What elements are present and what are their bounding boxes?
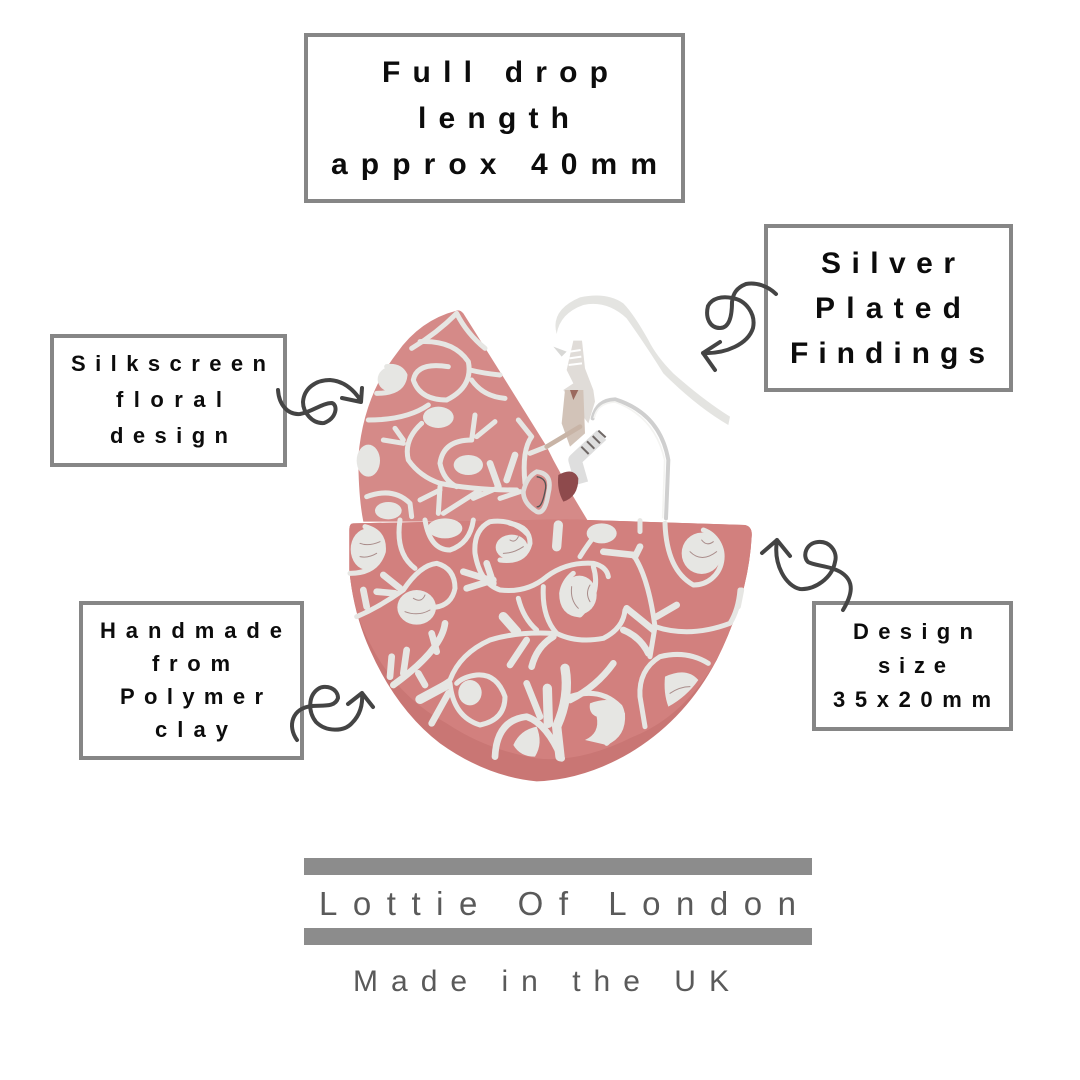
callout: design size: 35x20mm	[833, 687, 991, 712]
tagline: Made in the UK	[353, 965, 729, 998]
callout: handmade from polymer clay	[81, 603, 302, 758]
earring: back half-moon with floral pattern	[357, 310, 588, 522]
brand band	[304, 858, 812, 945]
callout: silkscreen floral design	[52, 336, 285, 465]
callout: handmade from polymer clay: Handmade	[100, 618, 282, 643]
callout: full drop length	[306, 35, 683, 201]
callout: full drop length: length	[418, 102, 569, 135]
arrow: to design size	[762, 540, 851, 610]
callout: silver plated findings	[766, 226, 1011, 390]
callout: design size	[814, 603, 1011, 729]
icon: silver ear hook, front	[523, 399, 668, 518]
arrow: to polymer clay	[292, 687, 373, 740]
arrow: to silkscreen design	[278, 380, 362, 423]
callout: full drop length: Full drop	[382, 56, 608, 89]
callout: silkscreen floral design: floral	[116, 387, 222, 412]
callout: silkscreen floral design: design	[110, 423, 228, 448]
callout: silver plated findings: Findings	[790, 337, 985, 370]
earring: front half-moon with floral pattern	[349, 518, 752, 781]
arrow: to silver findings	[703, 283, 776, 370]
sub-element: floral vines	[350, 518, 742, 758]
brand band: Lottie Of London	[319, 885, 796, 922]
callout: design size: size	[878, 653, 946, 678]
callout: handmade from polymer clay: Polymer	[120, 684, 263, 709]
callout: handmade from polymer clay: from	[152, 651, 230, 676]
callout: design size: Design	[853, 619, 973, 644]
callout: silver plated findings: Plated	[815, 292, 961, 325]
icon: silver ear hook, back	[547, 295, 730, 447]
callout: silkscreen floral design: Silkscreen	[71, 351, 266, 376]
callout: handmade from polymer clay: clay	[155, 717, 229, 742]
callout: silver plated findings: Silver	[821, 247, 955, 280]
callout: full drop length: approx 40mm	[331, 148, 657, 181]
